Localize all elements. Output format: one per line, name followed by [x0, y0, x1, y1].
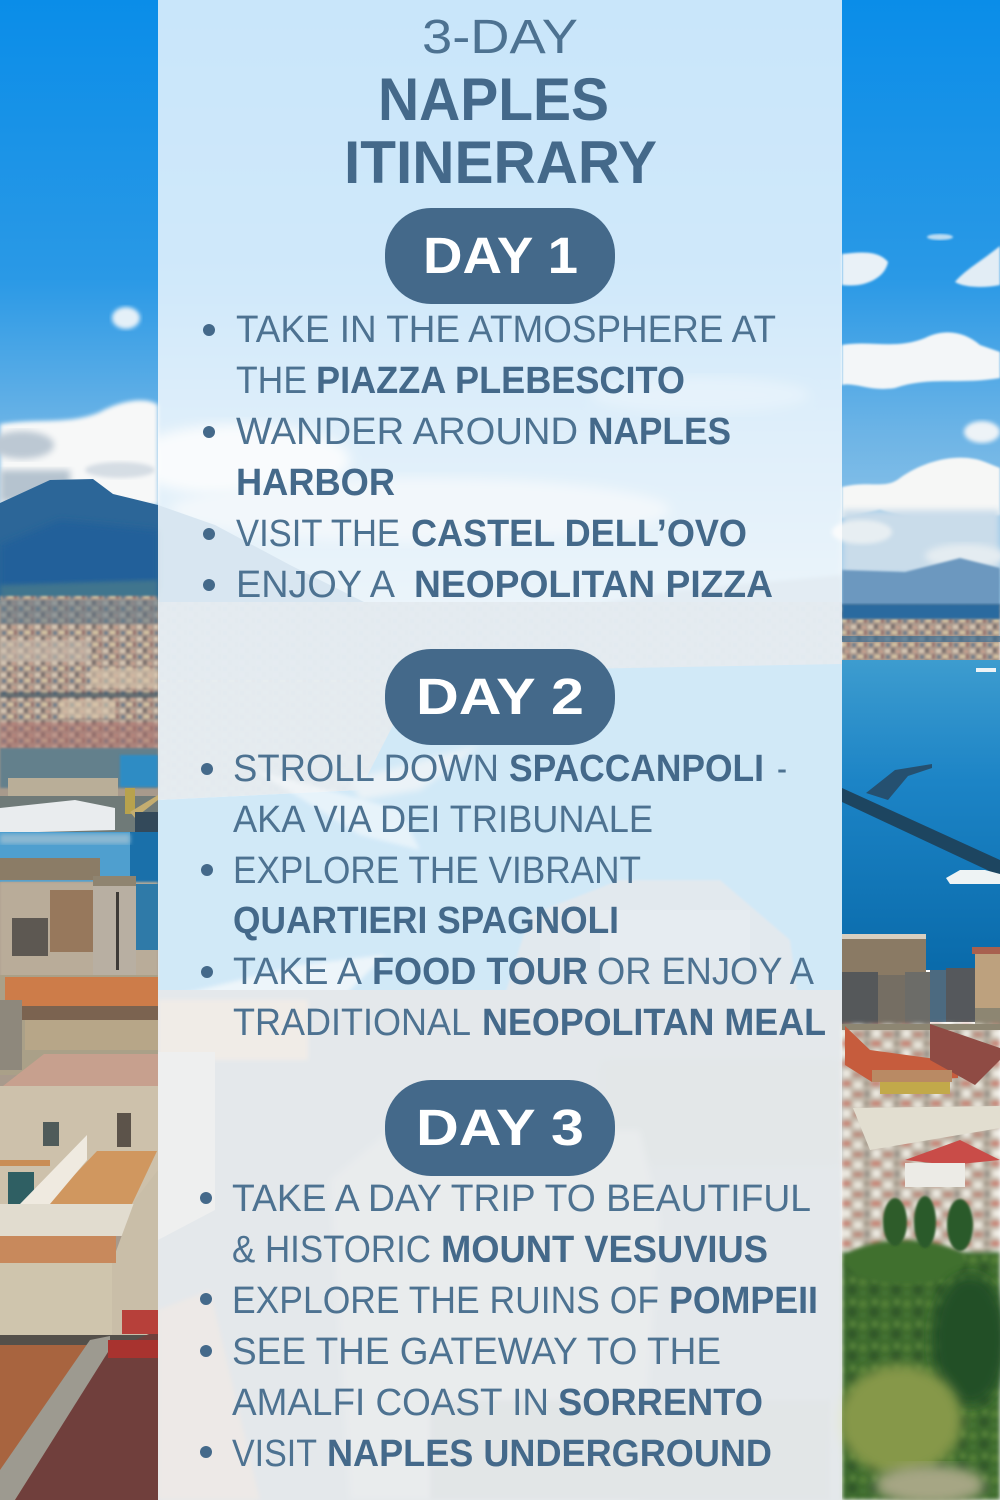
- day 3 list: NAPLES UNDERGROUND: [327, 1433, 772, 1475]
- day 3 list: VISIT: [232, 1433, 317, 1475]
- day 2 heading pill: [385, 649, 615, 745]
- bay: [842, 660, 1000, 970]
- day 2 list: QUARTIERI SPAGNOLI: [233, 900, 619, 942]
- day 1 list: CASTEL DELL’OVO: [411, 513, 747, 555]
- day 3 list: POMPEII: [669, 1280, 818, 1322]
- day 1 list: ENJOY A: [236, 564, 396, 606]
- day 3 list: SORRENTO: [558, 1382, 763, 1424]
- clouds: [842, 252, 888, 286]
- day 1 list: WANDER AROUND: [236, 411, 578, 453]
- title: ITINERARY: [344, 129, 657, 196]
- day 2 list: FOOD TOUR: [372, 951, 588, 993]
- day 2 list: TAKE A: [233, 951, 363, 993]
- central scene behind the panel: [130, 377, 842, 1500]
- day 2 list: EXPLORE THE VIBRANT: [233, 850, 641, 892]
- far shore: [842, 605, 1000, 665]
- breakwater: [842, 788, 1000, 876]
- title: NAPLES: [378, 66, 609, 133]
- title: 3-DAY: [422, 11, 578, 64]
- port: [0, 748, 158, 788]
- day 1 list: VISIT THE: [236, 513, 400, 555]
- day 2 list: OR ENJOY A: [597, 951, 815, 993]
- day 2 list: [201, 748, 826, 1044]
- distant mountains: [842, 558, 1000, 612]
- title: [344, 11, 657, 196]
- day 3 heading pill: DAY 3: [416, 1099, 584, 1156]
- day 2 list: TRADITIONAL: [233, 1002, 471, 1044]
- town: [842, 1024, 1000, 1254]
- trees: [842, 1252, 1000, 1500]
- day 1 list: PIAZZA PLEBESCITO: [316, 360, 685, 402]
- day 2 list: -: [777, 748, 787, 790]
- day 1 list: NEOPOLITAN PIZZA: [414, 564, 773, 606]
- day 2 heading pill: DAY 2: [416, 668, 584, 725]
- day 3 heading pill: [385, 1080, 615, 1176]
- cloud bank: [0, 400, 158, 510]
- day 3 list: MOUNT VESUVIUS: [441, 1229, 768, 1271]
- Mount Vesuvius: [0, 479, 158, 600]
- day 1 list: NAPLES: [588, 411, 731, 453]
- day 3 list: EXPLORE THE RUINS OF: [232, 1280, 659, 1322]
- translucent centre panel: [158, 0, 842, 1500]
- day 2 list: STROLL DOWN: [233, 748, 499, 790]
- day 1 list: HARBOR: [236, 462, 395, 504]
- day 2 list: AKA VIA DEI TRIBUNALE: [233, 799, 653, 841]
- day 2 list: SPACCANPOLI: [509, 748, 764, 790]
- day 3 list: & HISTORIC: [232, 1229, 431, 1271]
- left column: [0, 0, 158, 1500]
- day 1 heading pill: [385, 208, 615, 304]
- day 1 heading pill: DAY 1: [423, 227, 578, 284]
- city: [0, 596, 158, 752]
- day 1 list: [203, 309, 776, 606]
- day 3 list: [200, 1178, 818, 1475]
- ferry: [0, 800, 115, 833]
- terraces: [0, 975, 158, 1075]
- right column: [832, 0, 1000, 1500]
- day 2 list: NEOPOLITAN MEAL: [482, 1002, 826, 1044]
- day 1 list: TAKE IN THE ATMOSPHERE AT: [236, 309, 776, 351]
- small cloud: [112, 307, 140, 329]
- day 3 list: AMALFI COAST IN: [232, 1382, 549, 1424]
- harbour water: [0, 832, 158, 882]
- day 1 list: THE: [236, 360, 307, 402]
- day 3 list: SEE THE GATEWAY TO THE: [232, 1331, 721, 1373]
- lower blocks and towers: [0, 858, 100, 880]
- day 3 list: TAKE A DAY TRIP TO BEAUTIFUL: [232, 1178, 811, 1220]
- Castel Nuovo: [842, 936, 926, 976]
